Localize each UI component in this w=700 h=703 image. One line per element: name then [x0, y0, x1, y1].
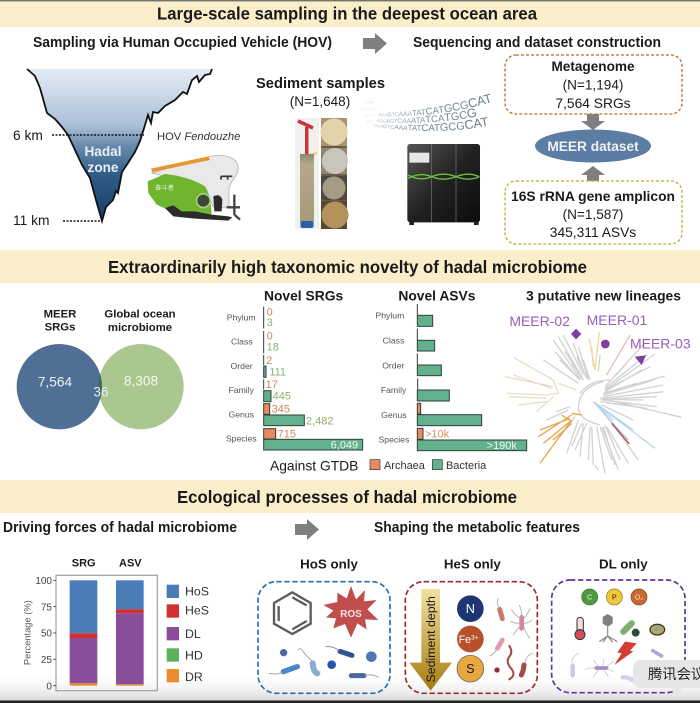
stacked bar chart: driving forces: ASV	[119, 557, 142, 569]
section 3 heading	[0, 480, 700, 513]
chart: novel ASVs: Class	[383, 336, 405, 346]
icon: phage	[599, 614, 617, 642]
hadal trench diagram: Hadal	[84, 144, 122, 159]
icon: carbon: C	[587, 595, 592, 602]
chart: novel ASVs: Family	[381, 385, 407, 395]
chart: novel ASVs: Genus	[381, 410, 407, 420]
chart: novel SRGs: 6,049	[331, 439, 358, 451]
chart: novel SRGs: 3	[267, 317, 273, 329]
chart: novel SRGs: 0	[267, 330, 273, 342]
stacked bar chart: driving forces: 75	[41, 602, 52, 613]
marker: MEER-03: MEER-03	[630, 335, 691, 351]
icon: iron: 3+	[471, 634, 479, 641]
stacked bar chart: driving forces: 100	[35, 576, 52, 587]
chart: novel SRGs: Species	[226, 434, 257, 444]
DNA sequence letters: A G	[367, 120, 372, 124]
HOV Fendouzhe submersible	[148, 131, 240, 221]
Venn diagram: Global ocean	[104, 309, 176, 321]
marker: MEER-03	[630, 335, 691, 365]
chart: novel SRGs: Order	[231, 361, 253, 371]
stacked bar chart: driving forces: 0	[46, 681, 52, 692]
chart: novel ASVs	[375, 288, 527, 452]
heading: sequencing: Sequencing and dataset construction	[413, 35, 661, 51]
chart: novel SRGs: 18	[267, 341, 279, 353]
legend: drivers	[167, 585, 209, 684]
Venn diagram: 8,308	[124, 374, 158, 389]
tooltip: video meeting overlay	[633, 660, 700, 697]
chart: novel ASVs: Order	[382, 360, 404, 370]
section 1 heading: Large-scale sampling in the deepest ocean area	[157, 4, 537, 24]
panel: HoS only: HoS only	[300, 557, 358, 572]
icon: phosphorus: P	[612, 595, 617, 602]
Venn diagram: 7,564	[38, 374, 72, 389]
hadal trench diagram: 6 km	[13, 128, 43, 143]
chart: novel SRGs: 111	[269, 367, 286, 379]
chart: novel ASVs: >190k	[487, 440, 517, 452]
icon: iron: Fe	[459, 634, 471, 646]
chart: novel SRGs: Family	[228, 385, 255, 395]
metagenome box: Metagenome	[551, 59, 635, 74]
chart: novel SRGs: Phylum	[227, 312, 256, 322]
icon: microbes	[269, 647, 378, 677]
Venn diagram: MEER	[44, 308, 76, 320]
icon: iron	[457, 626, 484, 652]
metagenome box: 7,564 SRGs	[555, 96, 631, 111]
MEER dataset ellipse	[535, 130, 651, 162]
legend: drivers: DR	[185, 670, 203, 684]
section 2 heading	[0, 250, 700, 283]
bottom screen shading	[0, 672, 700, 703]
16S rRNA box: (N=1,587)	[563, 207, 623, 222]
icon: ROS burst: ROS	[340, 609, 362, 620]
panel: HoS only	[258, 557, 390, 693]
DNA sequence letters: A T C G T A	[361, 107, 377, 111]
heading: driving forces: Driving forces of hadal microbiome	[3, 520, 237, 536]
section 2 heading: Extraordinarily high taxonomic novelty of hadal microbiome	[108, 257, 587, 277]
hadal trench diagram: zone	[88, 160, 119, 175]
stacked bar chart: driving forces: Percentage (%)	[23, 600, 33, 665]
legend: against GTDB: Against GTDB	[270, 458, 358, 474]
legend: drivers: DL	[185, 627, 201, 641]
chart: novel ASVs: Novel ASVs	[398, 288, 476, 304]
Venn diagram: 36	[93, 384, 109, 399]
stacked bar chart: driving forces: 25	[41, 655, 52, 666]
chart: novel SRGs: 17	[266, 379, 278, 391]
icon: microbes	[489, 598, 533, 679]
chart: novel SRGs: 345	[272, 404, 290, 416]
metagenome box: (N=1,194)	[563, 78, 623, 92]
legend: against GTDB: Archaea	[384, 460, 426, 472]
legend: drivers: HD	[185, 648, 203, 662]
marker: MEER-02	[509, 313, 581, 339]
panel: DL only	[552, 557, 685, 693]
chart: novel SRGs: Class	[231, 336, 253, 346]
HOV Fendouzhe submersible: HOV Fendouzhe	[157, 131, 240, 143]
16S rRNA box: 345,311 ASVs	[550, 225, 636, 240]
DNA sequence letters: T C A A	[363, 100, 374, 104]
icon: microbes	[572, 651, 662, 681]
icon: cell	[650, 624, 665, 635]
Venn diagram: SRGs	[45, 321, 75, 333]
legend: drivers: HoS	[185, 585, 209, 599]
phylogenetic tree: 3 putative new lineages: 3 putative new lineages	[526, 289, 681, 304]
DNA sequence letters	[361, 94, 490, 131]
arrow: sampling to sequencing	[363, 33, 387, 54]
panel: HeS only: HeS only	[444, 557, 501, 572]
tree branches	[505, 332, 682, 473]
panel: DL only: DL only	[599, 557, 648, 572]
icon: oxygen: O₂	[635, 595, 643, 602]
DNA sequence letters: AGAGTCAAATATCATGCGCAT	[378, 94, 490, 116]
legend: drivers: HeS	[185, 604, 209, 618]
chart: novel SRGs: 715	[278, 428, 296, 440]
sediment samples text	[256, 76, 385, 109]
sediment samples text: (N=1,648)	[290, 94, 350, 109]
section 3 heading: Ecological processes of hadal microbiome	[177, 487, 517, 507]
arrow: amplicon to MEER	[581, 166, 605, 182]
stacked bar chart: driving forces: 50	[41, 629, 52, 640]
stacked bar chart: driving forces: SRG	[72, 557, 96, 569]
panel: HeS only	[405, 557, 537, 693]
heading: sampling via HOV: Sampling via Human Occupied Vehicle (HOV)	[33, 35, 332, 51]
DNA sequence letters: G A T C	[364, 114, 375, 118]
arrow: metagenome to MEER	[581, 114, 605, 130]
16S rRNA box	[505, 181, 682, 244]
metagenome box	[505, 55, 682, 114]
Venn diagram	[17, 308, 184, 429]
chart: novel SRGs	[226, 288, 363, 451]
Venn diagram: microbiome	[108, 322, 172, 334]
stacked bar chart: driving forces	[23, 557, 209, 692]
icon: nitrogen: N	[466, 602, 475, 616]
chart: novel ASVs: Species	[379, 435, 410, 445]
phylogenetic tree: 3 putative new lineages	[505, 289, 691, 473]
legend: against GTDB: Bacteria	[446, 460, 487, 472]
legend: against GTDB	[270, 458, 487, 474]
chart: novel ASVs: >10k	[425, 429, 450, 441]
MEER dataset ellipse: MEER dataset	[547, 139, 639, 154]
16S rRNA box: 16S rRNA gene amplicon	[511, 189, 675, 204]
heading: metabolic features: Shaping the metabolic features	[374, 520, 580, 536]
hadal trench diagram	[13, 69, 212, 228]
chart: novel SRGs: 445	[273, 391, 291, 403]
hadal trench diagram: 11 km	[13, 213, 50, 228]
icon: benzene	[274, 592, 311, 634]
icon: lightning	[614, 642, 637, 665]
chart: novel SRGs: Novel SRGs	[264, 288, 343, 304]
HOV Fendouzhe submersible: 奋斗者	[155, 183, 174, 192]
icon: thermometer	[575, 617, 585, 640]
icon: sulfur: S	[466, 662, 475, 676]
section 1 heading	[0, 2, 700, 27]
chart: novel SRGs: Genus	[228, 410, 255, 420]
sediment core photo	[295, 118, 319, 229]
marker: MEER-02: MEER-02	[509, 313, 570, 329]
sequencer machine	[407, 144, 480, 225]
sediment samples text: Sediment samples	[256, 76, 385, 92]
chart: novel SRGs: 0	[267, 306, 273, 318]
chart: novel SRGs: 2	[266, 355, 272, 367]
DNA sequence letters: GGAGTCAAATATCATGCGCAT	[374, 117, 488, 131]
marker: MEER-01: MEER-01	[587, 312, 648, 328]
icon: pills	[623, 623, 640, 637]
chart: novel ASVs: Phylum	[375, 310, 404, 320]
arrow: driving forces to metabolic features	[295, 519, 319, 540]
chart: novel SRGs: 2,482	[306, 415, 333, 427]
DNA sequence letters: AGGAGTCAAATATCATGCG	[376, 108, 476, 124]
arrow: sediment depth: Sediment depth	[424, 596, 438, 683]
sediment surface photos	[320, 118, 348, 229]
marker: MEER-01	[587, 312, 648, 348]
Novel SRGs and ASVs bar charts	[226, 288, 527, 474]
